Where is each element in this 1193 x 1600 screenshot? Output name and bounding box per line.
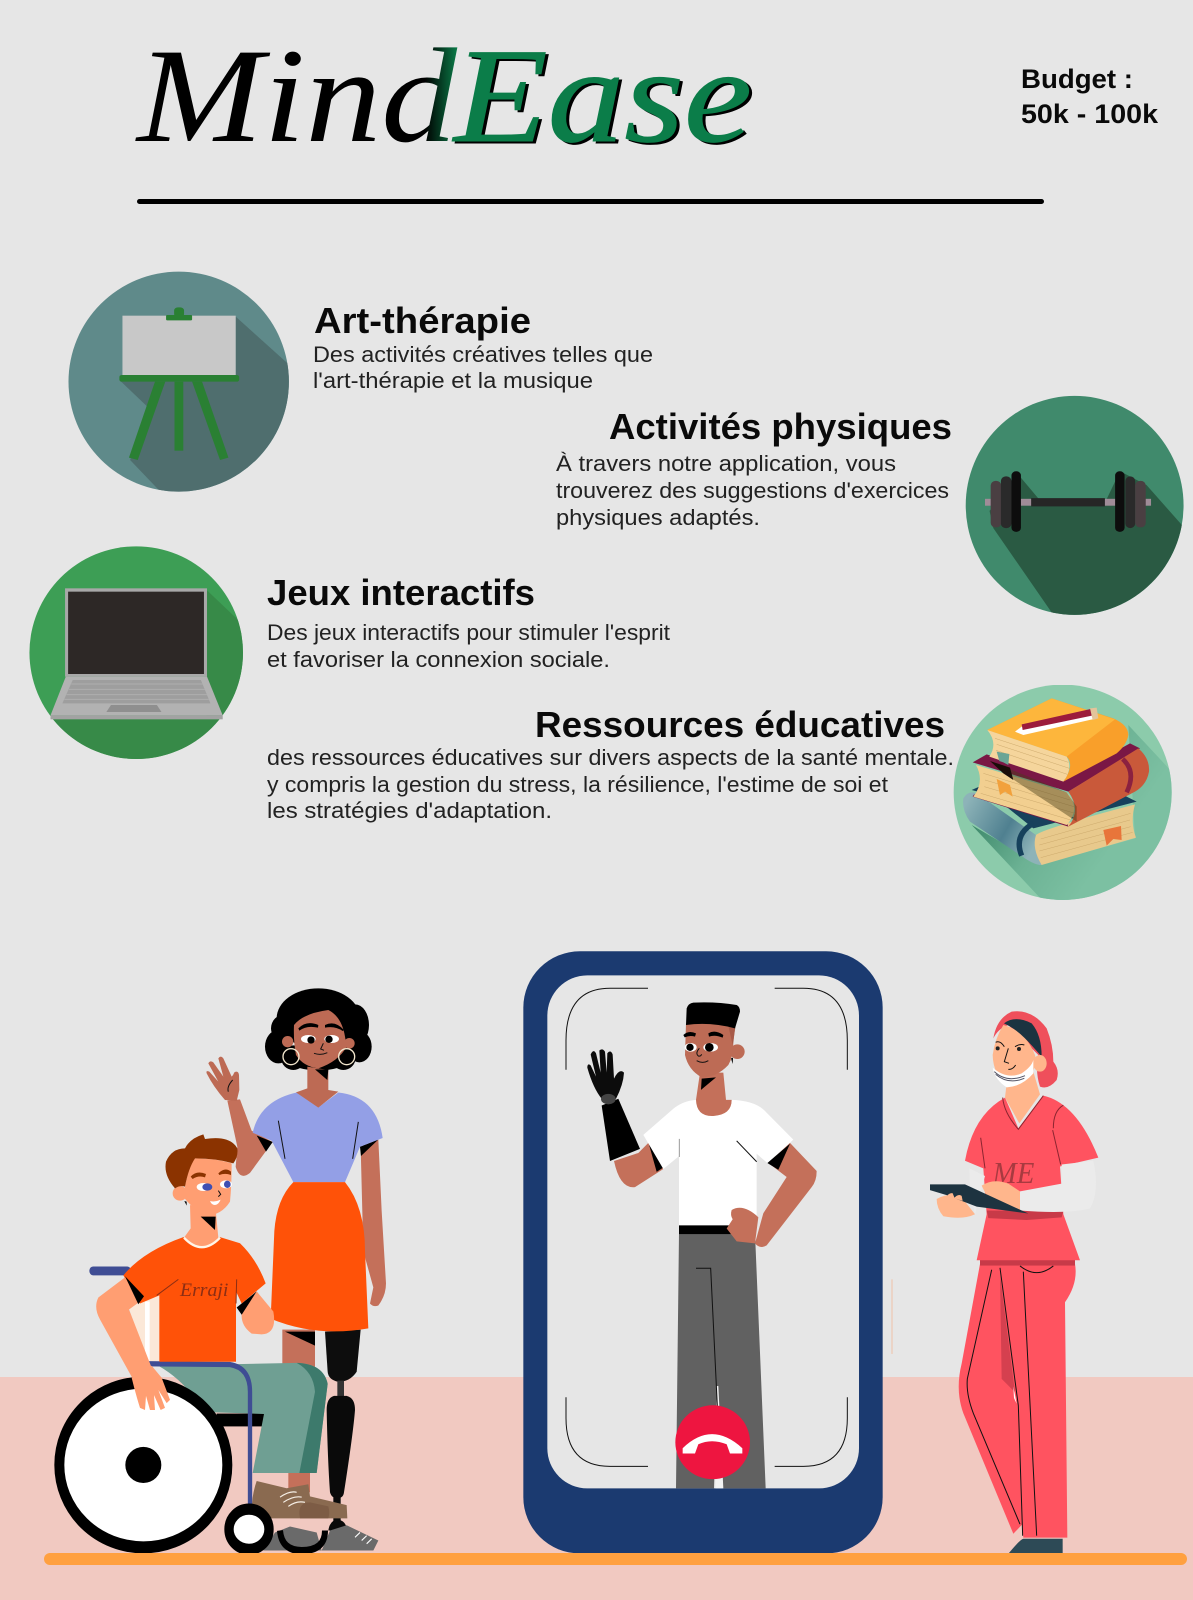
text block: Ressources éducatives: les stratégies d'adaptation. — [267, 798, 552, 823]
icon: laptop — [23, 546, 249, 767]
heading: Ressources éducatives: Ressources éducatives — [535, 704, 945, 745]
budget label: Budget : — [1021, 64, 1133, 94]
top book — [987, 698, 1128, 782]
ground line — [44, 1553, 1187, 1565]
text block: Ressources éducatives: y compris la gestion du stress, la résilience, l'estime de soi et — [267, 772, 889, 797]
small caster wheel — [229, 1509, 269, 1549]
trousers — [959, 1264, 1076, 1538]
scrub top — [965, 1096, 1098, 1260]
text block: Jeux interactifs — [267, 572, 671, 672]
faint vertical line — [891, 1279, 893, 1354]
icon: dumbbell — [966, 396, 1193, 621]
text block: Art-thérapie: l'art-thérapie et la musique — [313, 368, 593, 393]
text block: Activités physiques: physiques adaptés. — [556, 505, 760, 530]
icons in the left column — [23, 272, 306, 767]
icon: stack of books — [950, 685, 1175, 905]
shadow below tablet — [987, 1210, 1063, 1220]
phone frame — [523, 951, 883, 1554]
big wheel — [59, 1383, 227, 1547]
title: MindEase logo: Ease — [452, 22, 752, 171]
text block: Ressources éducatives: des ressources éducatives sur divers aspects de la santé mentale. — [267, 745, 954, 770]
woman head and neck — [206, 988, 372, 1108]
illustration: nurse with tablet — [891, 1011, 1098, 1554]
budget label: 50k - 100k — [1021, 99, 1159, 129]
man in wheelchair — [59, 1134, 347, 1551]
shirt print: Erraji — [179, 1280, 229, 1301]
budget label — [1021, 64, 1159, 129]
title: MindEase logo: Mind — [135, 22, 458, 171]
text block: Activités physiques: À travers notre application, vous — [556, 451, 896, 476]
bottom book — [963, 786, 1137, 865]
woman standing — [206, 988, 386, 1551]
icon: easel — [68, 272, 289, 492]
raised hand — [206, 1057, 239, 1101]
title: MindEase logo: Ease — [455, 24, 755, 173]
header divider line — [137, 199, 1044, 204]
text block: Jeux interactifs: et favoriser la connexion sociale. — [267, 647, 610, 672]
illustration: woman and man in wheelchair — [59, 988, 386, 1551]
heading: Art-thérapie: Art-thérapie — [314, 300, 531, 341]
man waving body — [587, 1049, 817, 1488]
title: MindEase logo — [135, 22, 755, 173]
man waving head — [683, 1002, 745, 1077]
heading: Jeux interactifs: Jeux interactifs — [267, 572, 535, 613]
sleeve — [1020, 1161, 1096, 1212]
text block: Art-thérapie — [313, 300, 653, 393]
middle book — [973, 743, 1149, 827]
text block: Jeux interactifs: Des jeux interactifs pour stimuler l'esprit — [267, 620, 671, 645]
heading: Activités physiques: Activités physiques — [609, 406, 952, 447]
text block: Activités physiques — [556, 406, 952, 530]
text block: Art-thérapie: Des activités créatives telles que — [313, 342, 653, 367]
tablet — [930, 1184, 1028, 1214]
viewfinder corners — [566, 988, 847, 1466]
shoe — [1008, 1539, 1063, 1554]
nurse head — [993, 1011, 1058, 1123]
hang-up button — [675, 1405, 750, 1479]
text block: Activités physiques: trouverez des suggestions d'exercices — [556, 478, 949, 503]
ME logo: ME — [992, 1156, 1035, 1190]
floor band — [0, 1377, 1193, 1600]
waist shadow — [980, 1259, 1075, 1266]
illustration: video call phone — [523, 951, 883, 1554]
man head and neck — [166, 1134, 237, 1247]
text block: Ressources éducatives — [267, 704, 954, 823]
phone screen — [547, 975, 859, 1488]
